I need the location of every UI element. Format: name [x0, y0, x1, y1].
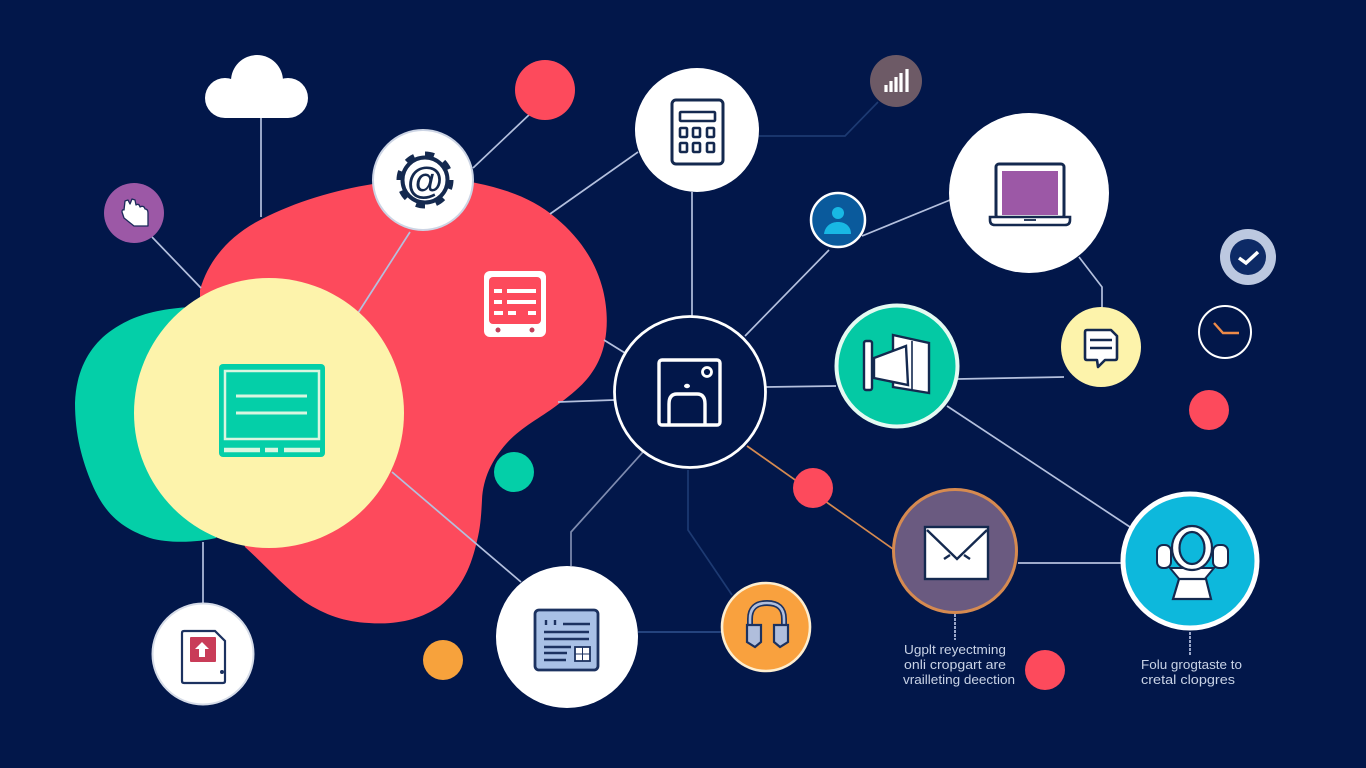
node: headphones: [722, 583, 810, 671]
text: left caption: Ugplt reyectming: [904, 643, 1006, 657]
dot: red top: [515, 60, 575, 120]
icon: list tablet on red blob: [484, 271, 546, 337]
node: person: [811, 193, 865, 247]
dot: red on orange line: [793, 468, 833, 508]
node: calculator: [635, 68, 759, 192]
connector lines: [152, 102, 1190, 655]
panel: yellow main circle: [134, 278, 404, 548]
node: megaphone: [836, 306, 958, 426]
node: clock: [1199, 306, 1251, 358]
node: at-sign gear: @: [407, 160, 443, 201]
dot: red right: [1189, 390, 1229, 430]
node: central floppy: [614, 316, 766, 468]
text: right caption: cretal clopgres: [1141, 673, 1235, 687]
node: file upload: [152, 604, 254, 704]
text: right caption: [1141, 658, 1242, 687]
icon: green screen: [219, 364, 325, 457]
node: signal bars: [870, 55, 922, 107]
node: check badge: [1220, 229, 1276, 285]
blob: red: [200, 179, 607, 623]
text: right caption: Folu grogtaste to: [1141, 658, 1242, 672]
node: purple hand: [104, 183, 164, 243]
icon: cloud: [205, 55, 308, 118]
node: astronaut helmet: [1123, 494, 1257, 628]
node: laptop: [949, 113, 1109, 273]
text: left caption: onli cropgart are: [904, 658, 1006, 672]
dot: green small: [494, 452, 534, 492]
blob: green: [75, 307, 260, 542]
dot: red bottom: [1025, 650, 1065, 690]
node: article page: [496, 566, 638, 708]
node: mail: [894, 490, 1016, 612]
node: chat note: [1061, 307, 1141, 387]
text: left caption: [903, 643, 1015, 687]
node: at-sign gear: [373, 130, 473, 230]
dot: orange bottom: [423, 640, 463, 680]
text: left caption: vrailleting deection: [903, 673, 1015, 687]
